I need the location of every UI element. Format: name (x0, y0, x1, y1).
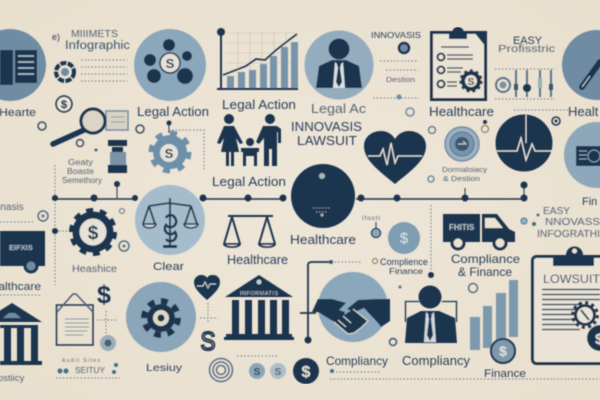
text block: Geaty Boaste Semethory (62, 158, 102, 185)
text block: Easy Professtric: Profisstric (498, 44, 555, 55)
text block: Compliance Finance small: $ (400, 230, 409, 247)
icon: truck, cropped left (0, 231, 45, 272)
label: Legal Action family caption: Legal Action (212, 174, 286, 189)
text block: Seituy: Audit Sites (62, 358, 100, 364)
divider label: bottom dotted rule (330, 378, 600, 380)
text block: Compliance Finance small: Complience (380, 257, 428, 267)
icon: clipboard checklist with gear: S (468, 77, 475, 88)
heading: Innovasis Lawsuit (291, 119, 362, 148)
text block: Dormalency & Destion: & Destion (443, 174, 480, 183)
label: Compliancy handshake caption: Compliancy (326, 354, 388, 368)
icon: small dollar badge: $ (61, 99, 67, 111)
icon: target badge with text lines (56, 60, 127, 81)
connector: left timeline (52, 165, 138, 285)
bar chart: finance bars (470, 280, 518, 350)
label: Healthcare clipboard caption: Healthcare (429, 104, 494, 119)
text block: Easy Professtric: EASY (513, 35, 543, 47)
panel: books circle, top left (0, 29, 46, 101)
icon: small coin ring (398, 284, 478, 292)
text block: Compliance Finance small: Ifoott (362, 216, 380, 222)
icon: delivery truck (443, 214, 515, 249)
label: Legal Action chart caption: Legal Action (222, 97, 296, 112)
icon: balance scales (224, 216, 275, 247)
label: Compliancy person caption: Compliancy (402, 354, 471, 368)
icon: dollar outline with connector: S (200, 326, 216, 356)
icon: small heart with pulse (194, 275, 220, 300)
text block: Easy Innovass Infographic, right: INFOGRATHI (537, 229, 600, 240)
icon: small dollar badge (56, 96, 72, 112)
title: Miimets Infographic (52, 29, 130, 52)
panel: gears and dollar circle: S (166, 56, 175, 71)
panel: gear circle, bottom centre (126, 282, 196, 352)
text block: Seituy: SEITUY (75, 366, 106, 375)
text block: Easy Professtric (498, 35, 555, 55)
label: Compliance & Finance (451, 252, 520, 279)
bar chart: rising growth (217, 28, 298, 89)
text block: Dormalency & Destion (442, 165, 487, 183)
text block: Innovasis Destion: Destion (386, 75, 415, 84)
text block: Easy Innovass Infographic, right: NNOVASS (545, 216, 600, 228)
text block: Geaty Boaste Semethory: Semethory (62, 176, 102, 185)
icon: blue dollar gear: S (165, 146, 174, 161)
icon: sliders panel (495, 69, 555, 99)
label: Healt: Healt (568, 104, 599, 119)
icon: navy dollar gear: $ (88, 223, 99, 244)
icon: navy dollar coin (293, 358, 319, 384)
text block: Easy Innovass Infographic, right: Fin (582, 196, 597, 208)
icon: finance dollar coin (491, 339, 515, 363)
icon: family of three (217, 114, 281, 166)
icon: report document (56, 294, 118, 351)
panel: handshake circle (300, 260, 396, 346)
label: Legal Ac: Legal Ac (311, 102, 366, 116)
icon: small rings (38, 122, 98, 152)
label: Compliance & Finance: & Finance (458, 265, 512, 279)
icon: navy dollar sign: $ (97, 281, 111, 309)
label: Clear: Clear (153, 261, 184, 273)
heading: Innovasis Lawsuit: INNOVASIS (291, 119, 362, 134)
connector: centre timelines (200, 182, 528, 202)
icon: spiral coin and dollar coins (210, 356, 286, 382)
label: Healthcare navy circle caption: Healthcare (290, 232, 356, 247)
icon: truck, cropped left: EIFXIS (9, 243, 33, 252)
icon: spiral coin and dollar coins: S (275, 367, 282, 378)
icon: clipboard checklist with gear (432, 27, 486, 100)
icon: institution building: INFORMATIS (240, 291, 278, 297)
text block: Geaty Boaste Semethory: Boaste (67, 167, 95, 176)
text block: Dormalency & Destion: Dormaloiacy (442, 165, 487, 174)
icon: gavel block (108, 140, 127, 173)
panel: navy healthcare circle, centre (291, 164, 355, 228)
heading: Innovasis Lawsuit: LAWSUIT (297, 133, 357, 148)
icon: navy dollar coin: $ (302, 364, 311, 381)
icon: finance dollar coin: $ (499, 343, 507, 359)
icon: heart with pulse (364, 131, 426, 184)
text block: Innovasis Destion: INNOVASIS (371, 30, 421, 40)
panel: screen circle, right (564, 122, 600, 188)
panel: scales and caduceus circle (135, 185, 205, 255)
label: Lesiuy: Lesiuy (146, 362, 183, 374)
panel: businessman circle (304, 30, 374, 100)
label: Legal Action: Legal Action (137, 104, 209, 119)
icon: lawsuit clipboard (532, 246, 600, 364)
icon: small ring and divider (514, 110, 568, 125)
icon: magnifier over document (53, 109, 128, 144)
text block: Compliance Finance small (362, 205, 434, 278)
label: Finance: Finance (484, 368, 526, 380)
icon: pie with pulse line (496, 114, 552, 172)
text block: Seituy (56, 358, 120, 378)
title: Miimets Infographic: MIIIMETS (71, 29, 118, 40)
text block: Easy Innovass Infographic, right: EASY (543, 205, 570, 217)
panel: pen circle, top right (562, 30, 600, 100)
text block: Easy Innovass Infographic, right (521, 196, 600, 240)
title: Miimets Infographic: Infographic (65, 40, 130, 52)
text block: Geaty Boaste Semethory: Geaty (68, 158, 93, 167)
icon: bank left (0, 303, 42, 365)
panel: gears and dollar circle (134, 29, 206, 101)
title: Miimets Infographic: e) (52, 32, 60, 42)
label: Healthcare scales caption: Healthcare (227, 253, 288, 267)
icon: spiral coin and dollar coins: S (254, 367, 261, 378)
icon: lawsuit clipboard: LOWSUIT (543, 274, 600, 286)
icon: delivery truck: FHITIS (449, 223, 475, 232)
icon: blue dollar gear (136, 120, 204, 171)
icon: person in frame (405, 286, 457, 343)
label: Heashice: Heashice (72, 264, 117, 275)
icon: institution building (224, 275, 294, 340)
text block: Innovasis Destion (371, 30, 421, 116)
icon: target rings (428, 120, 488, 182)
label: Innasis cropped (0, 202, 48, 222)
icon: navy dollar gear (71, 208, 129, 254)
icon: dollar outline with connector (200, 303, 218, 356)
text block: Compliance Finance small: Finance (389, 266, 423, 276)
label: Compliance & Finance: Compliance (451, 252, 520, 266)
